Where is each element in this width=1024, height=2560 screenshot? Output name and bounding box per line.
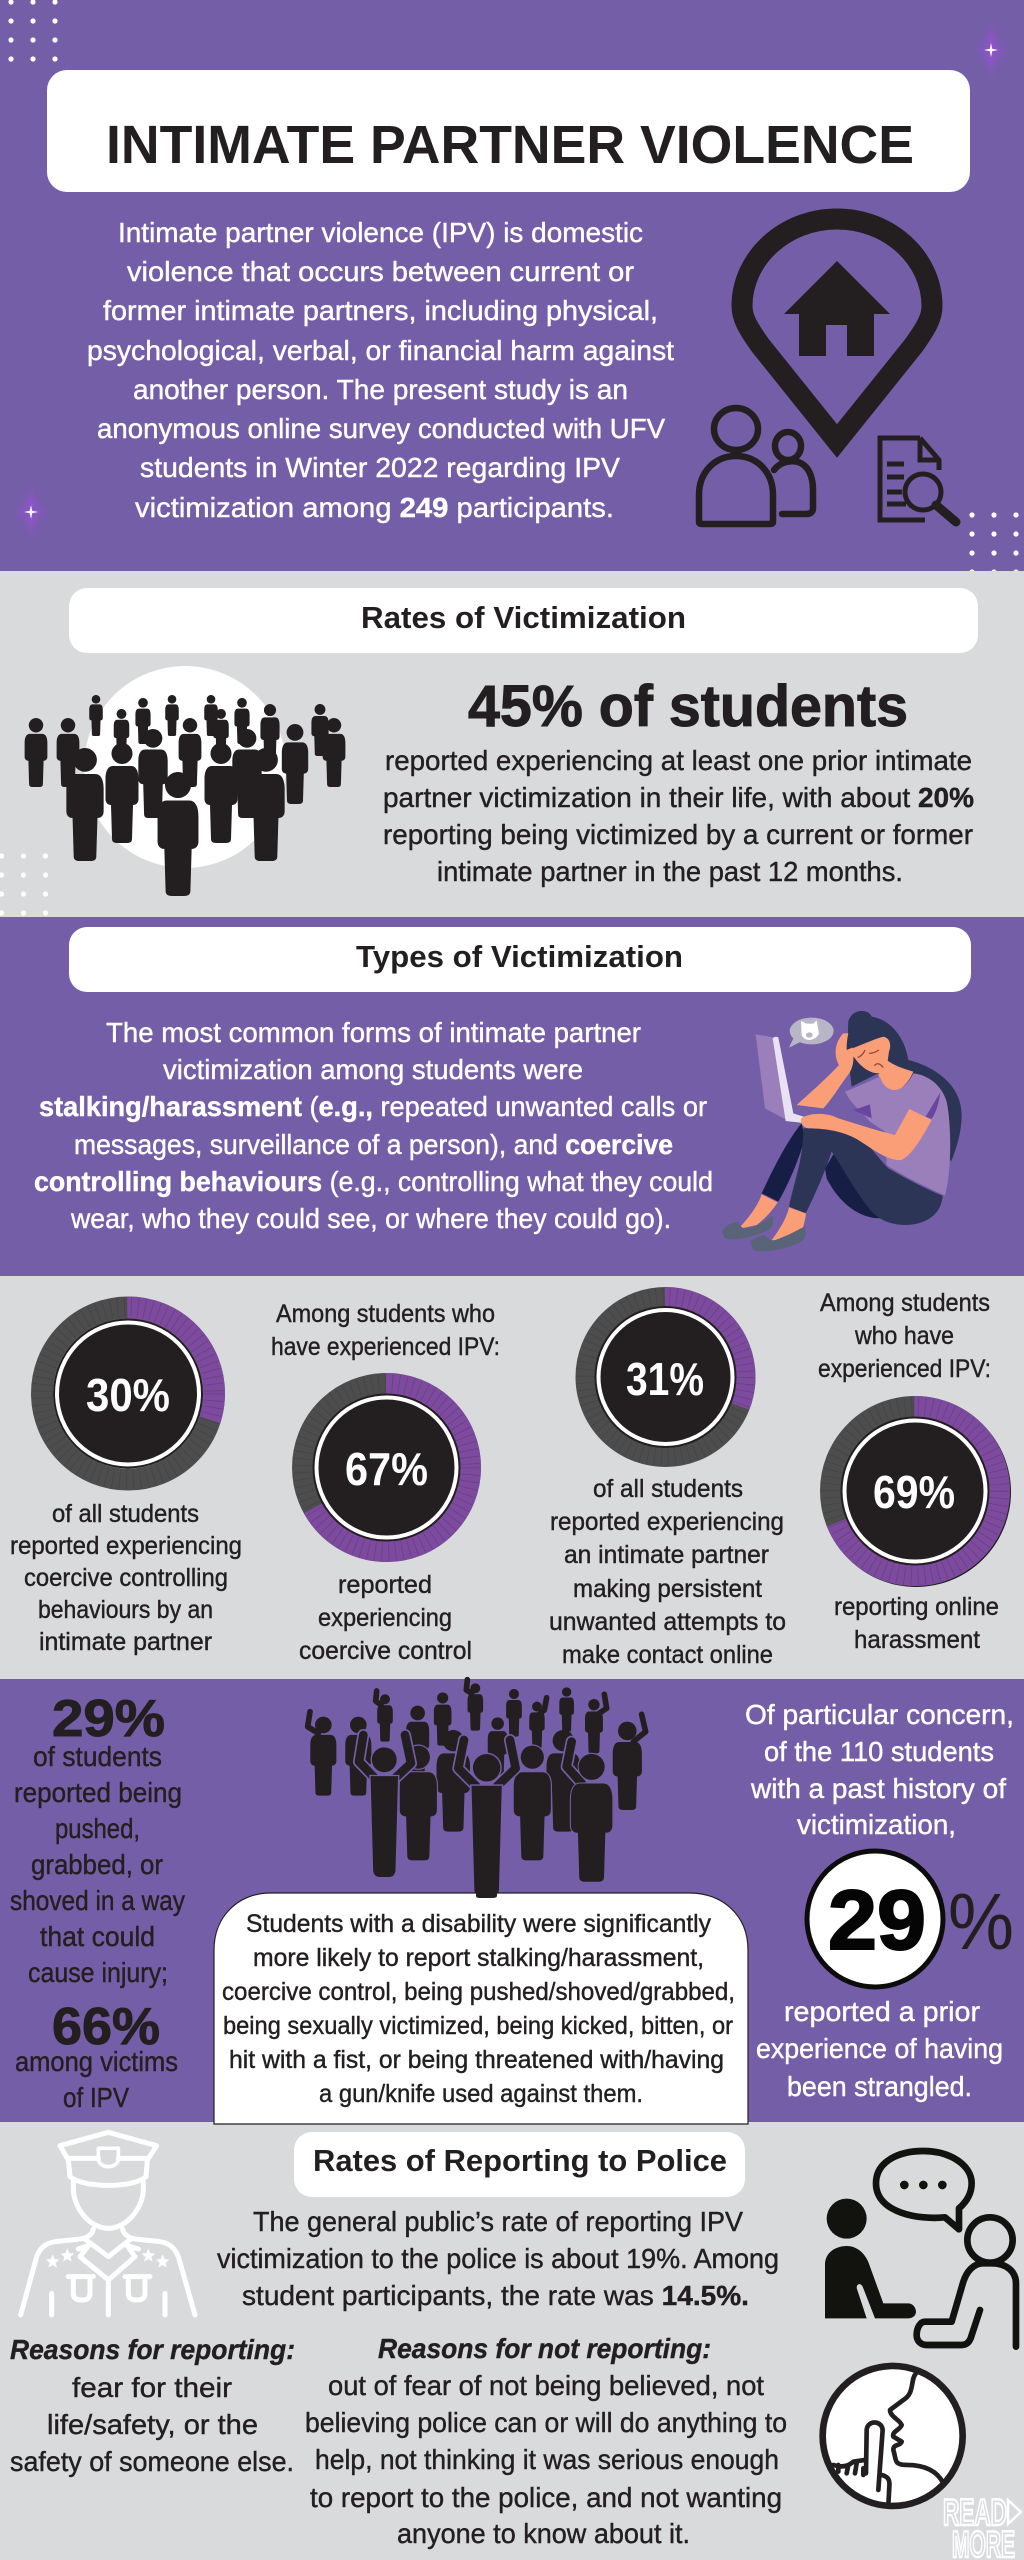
donut chart: 30%: [42, 1308, 214, 1480]
stat: 29% pushed or grabbed: of students: [33, 1741, 162, 1772]
reasons for not reporting: help, not thinking it was serious enough: [315, 2444, 779, 2475]
caption: 31%: make contact online: [562, 1641, 773, 1669]
reasons for not reporting: out of fear of not being believed, not: [328, 2370, 764, 2401]
caption: 30%: coercive controlling: [24, 1564, 228, 1592]
stat: 29% strangled: [807, 1851, 1014, 1987]
reasons for not reporting: believing police can or will do anything to: [305, 2407, 787, 2438]
intro text block: victimization among 249 participants.: [135, 492, 614, 523]
lead-in: among students who have experienced IPV: Among students: [820, 1289, 990, 1317]
types text block: messages, surveillance of a person), and coercive: [74, 1129, 673, 1160]
rates text block: [383, 745, 974, 887]
callout: students with a disability: being sexually victimized, being kicked, bitten, or: [223, 2012, 733, 2040]
lead-in: of particular concern: Of particular concern,: [745, 1699, 1014, 1730]
intro text block: [87, 217, 674, 523]
intro text block: psychological, verbal, or financial harm against: [87, 335, 674, 366]
lead-in: among students who have experienced IPV: [271, 1300, 500, 1361]
callout: students with a disability: coercive control, being pushed/shoved/grabbed,: [222, 1978, 735, 2006]
panel: types of victimization: [0, 917, 1024, 1276]
lead-in: among students who have experienced IPV: who have: [854, 1322, 954, 1350]
panel: rates of victimization: [0, 571, 1024, 917]
heading: rates of reporting to police: Rates of Reporting to Police: [313, 2143, 727, 2178]
stat: 29% pushed or grabbed: reported being: [14, 1777, 182, 1808]
stat: 29% pushed or grabbed: shoved in a way: [10, 1885, 185, 1916]
callout: students with a disability: a gun/knife used against them.: [319, 2080, 643, 2108]
callout: students with a disability: more likely to report stalking/harassment,: [253, 1944, 704, 1972]
intro text block: former intimate partners, including physical,: [103, 295, 658, 326]
reasons for reporting: safety of someone else.: [10, 2446, 294, 2477]
donut chart: 30%: 30%: [86, 1369, 170, 1421]
caption: 69%: reporting online: [834, 1593, 999, 1621]
intro text block: anonymous online survey conducted with UFV: [97, 413, 666, 444]
icon: document with magnifier: [880, 438, 956, 522]
icon: two people: [699, 408, 813, 524]
stat: 66% among victims: [15, 1998, 178, 2113]
caption: 69%: harassment: [854, 1626, 980, 1654]
reasons for reporting: fear for their: [72, 2372, 232, 2403]
caption: 67%: experiencing: [318, 1604, 452, 1632]
caption: 30%: of all students: [52, 1500, 199, 1528]
caption: 67%: coercive control: [299, 1637, 472, 1665]
donut chart: 69%: [821, 1397, 1011, 1587]
stat: 29% pushed or grabbed: pushed,: [55, 1813, 140, 1844]
police rates text block: [217, 2206, 779, 2311]
stat: 29% pushed or grabbed: [10, 1690, 185, 1988]
intro text block: violence that occurs between current or: [127, 256, 634, 287]
police rates text block: victimization to the police is about 19%. Among: [217, 2243, 779, 2274]
caption: 31%: an intimate partner: [564, 1541, 769, 1569]
lead-in: of particular concern: with a past history of: [750, 1773, 1006, 1804]
caption: 69%: [834, 1593, 999, 1654]
stat: 29% strangled: 29: [828, 1873, 926, 1967]
heading: rates of victimization: Rates of Victimization: [361, 600, 686, 635]
caption: 31%: of all students: [593, 1475, 743, 1503]
stat: 66% among victims: among victims: [15, 2046, 178, 2077]
intro text block: Intimate partner violence (IPV) is domestic: [118, 217, 643, 248]
caption: 31%: making persistent: [573, 1575, 762, 1603]
caption: prior strangulation: experience of having: [756, 2033, 1003, 2064]
rates text block: intimate partner in the past 12 months.: [437, 856, 903, 887]
reasons for not reporting: Reasons for not reporting:: [378, 2333, 711, 2364]
rates text block: reported experiencing at least one prior intimate: [385, 745, 972, 776]
callout: students with a disability: hit with a fist, or being threatened with/having: [229, 2046, 724, 2074]
caption: 30%: behaviours by an: [38, 1596, 213, 1624]
lead-in: among students who have experienced IPV: experienced IPV:: [818, 1355, 991, 1383]
panel: intro: [0, 0, 1024, 575]
reasons for not reporting: to report to the police, and not wanting: [310, 2482, 782, 2513]
caption: 67%: reported: [338, 1571, 432, 1599]
title card: INTIMATE PARTNER VIOLENCE: [106, 115, 914, 175]
caption: prior strangulation: been strangled.: [787, 2071, 972, 2102]
donut chart: 69%: 69%: [873, 1466, 955, 1518]
intro text block: students in Winter 2022 regarding IPV: [140, 452, 621, 483]
panel: donut statistics: [0, 1276, 1024, 1679]
caption: prior strangulation: reported a prior: [784, 1996, 980, 2027]
reasons for not reporting: anyone to know about it.: [397, 2518, 690, 2549]
types text block: controlling behaviours (e.g., controlling what they could: [34, 1166, 713, 1197]
title card: [47, 70, 970, 192]
stat: 29% pushed or grabbed: that could: [40, 1921, 155, 1952]
illustration: distressed woman with laptop: [722, 1011, 962, 1251]
icon: crowd with raised arms: [308, 1680, 646, 1898]
caption: 30%: intimate partner: [39, 1628, 212, 1656]
reasons for reporting: [10, 2334, 295, 2477]
caption: 31%: unwanted attempts to: [549, 1608, 786, 1636]
caption: 30%: [10, 1500, 242, 1656]
stat: 45% of students: 45% of students: [468, 674, 908, 739]
rates text block: partner victimization in their life, with about 20%: [383, 782, 974, 813]
caption: 67%: [299, 1571, 472, 1665]
donut chart: 31%: [586, 1297, 746, 1457]
heading: rates of reporting to police: [294, 2132, 745, 2197]
donut chart: 31%: 31%: [626, 1353, 704, 1405]
police rates text block: The general public’s rate of reporting IPV: [253, 2206, 744, 2237]
icon: crowd in white circle: [25, 666, 345, 896]
police rates text block: student participants, the rate was 14.5%.: [242, 2280, 749, 2311]
types text block: [34, 1017, 713, 1234]
types text block: wear, who they could see, or where they could go).: [70, 1203, 671, 1234]
rates text block: reporting being victimized by a current or former: [383, 819, 973, 850]
lead-in: among students who have experienced IPV: [818, 1289, 991, 1383]
stat: 66% among victims: of IPV: [63, 2082, 130, 2113]
caption: 31%: reported experiencing: [550, 1508, 784, 1536]
caption: prior strangulation: [756, 1996, 1003, 2102]
lead-in: among students who have experienced IPV: Among students who: [276, 1300, 495, 1328]
stat: 66% among victims: 66%: [52, 1998, 160, 2056]
panel: physical violence and disability: [0, 1679, 1024, 2124]
lead-in: of particular concern: victimization,: [797, 1809, 956, 1840]
icon: person shushing: [823, 2366, 963, 2506]
caption: 30%: reported experiencing: [10, 1532, 242, 1560]
label: read more: [943, 2492, 1021, 2560]
icon: location pin with house: [742, 219, 932, 441]
heading: types of victimization: [69, 927, 971, 992]
reasons for reporting: Reasons for reporting:: [10, 2334, 295, 2365]
stat: 29% pushed or grabbed: 29%: [52, 1690, 165, 1748]
heading: rates of victimization: [69, 588, 978, 653]
intro text block: another person. The present study is an: [133, 374, 628, 405]
donut chart: 67%: [302, 1384, 470, 1552]
donut chart: 67%: 67%: [345, 1443, 428, 1495]
reasons for reporting: life/safety, or the: [47, 2409, 258, 2440]
types text block: The most common forms of intimate partner: [106, 1017, 641, 1048]
stat: 29% pushed or grabbed: cause injury;: [28, 1957, 168, 1988]
stat: 29% strangled: %: [948, 1877, 1014, 1966]
callout: students with a disability: Students with a disability were significantly: [246, 1910, 711, 1938]
heading: types of victimization: Types of Victimization: [356, 939, 683, 974]
callout: students with a disability: [214, 1880, 748, 2124]
icon: police officer: [21, 2132, 195, 2315]
lead-in: of particular concern: [745, 1699, 1014, 1840]
lead-in: of particular concern: of the 110 students: [764, 1736, 994, 1767]
lead-in: among students who have experienced IPV: have experienced IPV:: [271, 1333, 500, 1361]
types text block: stalking/harassment (e.g., repeated unwanted calls or: [39, 1091, 707, 1122]
reasons for not reporting: [305, 2333, 787, 2549]
icon: two people talking: [825, 2151, 1016, 2347]
panel: reporting to police: [0, 2122, 1024, 2560]
types text block: victimization among students were: [163, 1054, 583, 1085]
caption: 31%: [549, 1475, 786, 1669]
stat: 29% pushed or grabbed: grabbed, or: [31, 1849, 163, 1880]
